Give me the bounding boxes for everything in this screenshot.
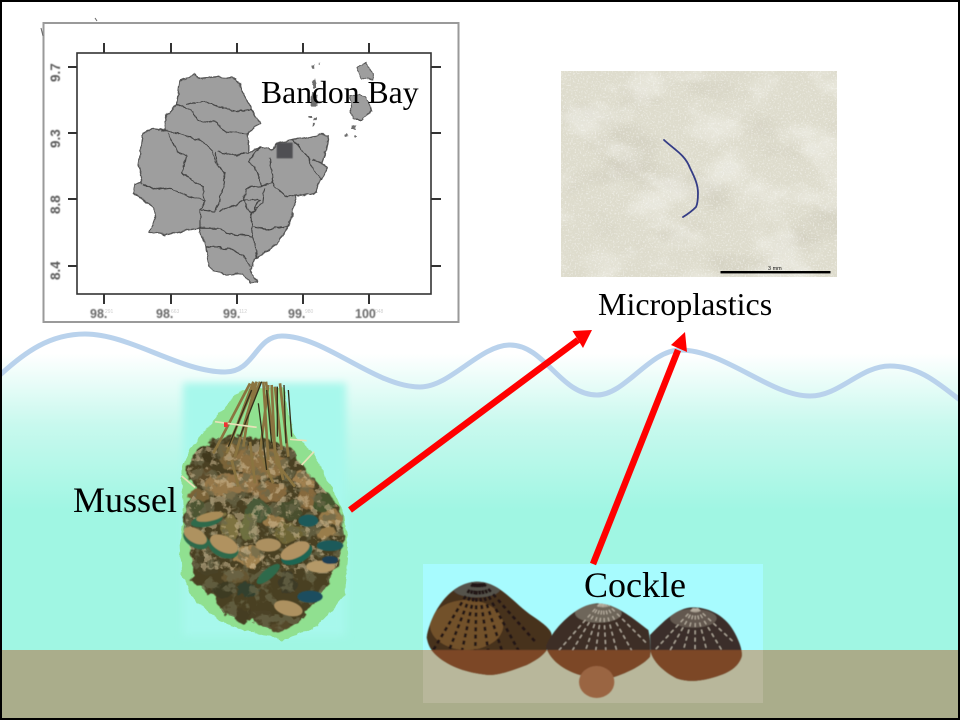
x axis labels: 98. bbox=[90, 307, 107, 321]
y axis labels: 9.3 bbox=[48, 129, 63, 148]
y axis labels: 8.8 bbox=[48, 195, 63, 214]
shell ribs bbox=[432, 582, 734, 651]
cockle image backdrop bbox=[423, 564, 763, 650]
mottled sand texture bbox=[180, 433, 347, 573]
label: Bandon Bay: Bandon Bay bbox=[261, 75, 419, 110]
mainland outline bbox=[133, 75, 328, 283]
shell shading bbox=[430, 600, 503, 650]
arrow: mussel to microplastics bbox=[350, 330, 592, 510]
x axis labels: 100 bbox=[355, 307, 376, 321]
map panel: Bandon Bay bbox=[41, 18, 458, 322]
red tag bbox=[224, 422, 228, 427]
mussel shells bbox=[186, 443, 345, 632]
study area square bbox=[277, 143, 293, 158]
province map bbox=[133, 63, 373, 283]
label: Cockle: Cockle bbox=[584, 565, 686, 605]
shell left bbox=[427, 582, 552, 675]
label: Mussel: Mussel bbox=[73, 480, 177, 520]
water surface wave bbox=[0, 334, 960, 400]
mottled dark texture bbox=[180, 433, 347, 633]
green leaf backing bbox=[180, 387, 348, 640]
faint axis superscripts: 980 bbox=[305, 309, 314, 315]
shaded paper texture bbox=[606, 128, 837, 270]
base mass bbox=[183, 437, 344, 632]
blue fibre bbox=[664, 140, 698, 217]
cockle image bbox=[423, 564, 763, 703]
open shells on top bbox=[180, 510, 343, 619]
small islets bbox=[309, 63, 356, 137]
map plot area with ticks bbox=[68, 43, 441, 304]
stray map marks bbox=[41, 18, 97, 36]
shell middle bbox=[546, 603, 650, 678]
faint axis superscripts: 112 bbox=[239, 309, 247, 315]
faint axis superscripts: 663 bbox=[171, 309, 180, 315]
mussel mass with shells bbox=[183, 437, 345, 632]
faint axis superscripts: 048 bbox=[375, 309, 384, 315]
pebble bbox=[579, 666, 614, 698]
x axis labels: 98. bbox=[156, 307, 173, 321]
map frame bbox=[44, 23, 458, 322]
micrograph base bbox=[561, 71, 837, 277]
x axis labels: 99. bbox=[223, 307, 240, 321]
arrow: cockle to microplastics bbox=[593, 332, 687, 564]
faint axis superscripts bbox=[105, 309, 384, 315]
faint axis superscripts: 291 bbox=[105, 309, 114, 315]
islands bbox=[350, 63, 373, 120]
microplastics micrograph bbox=[561, 71, 837, 277]
sparkle grain bbox=[561, 71, 837, 277]
support sticks bbox=[182, 422, 314, 487]
cockle shells bbox=[427, 581, 742, 698]
mussel image bbox=[180, 382, 348, 640]
shell parts seen through sediment bbox=[432, 649, 742, 682]
mussel image backdrop bbox=[183, 383, 346, 636]
bright paper patches bbox=[561, 71, 837, 277]
hanging ropes bbox=[213, 382, 295, 487]
scale bar bbox=[720, 271, 830, 273]
shell right bbox=[650, 607, 742, 681]
x axis labels: 99. bbox=[288, 307, 305, 321]
mainland with districts bbox=[133, 63, 373, 283]
y axis labels bbox=[48, 63, 63, 280]
backdrop under sediment bbox=[423, 650, 763, 703]
sediment layer bbox=[0, 650, 960, 720]
x axis labels bbox=[90, 307, 376, 321]
y axis labels: 9.7 bbox=[48, 63, 63, 82]
mussel cluster artwork bbox=[180, 382, 348, 640]
scale bar label: 3 mm bbox=[768, 266, 782, 272]
district borders bbox=[143, 100, 322, 267]
label: Microplastics: Microplastics bbox=[598, 286, 772, 322]
y axis labels: 8.4 bbox=[48, 261, 63, 280]
